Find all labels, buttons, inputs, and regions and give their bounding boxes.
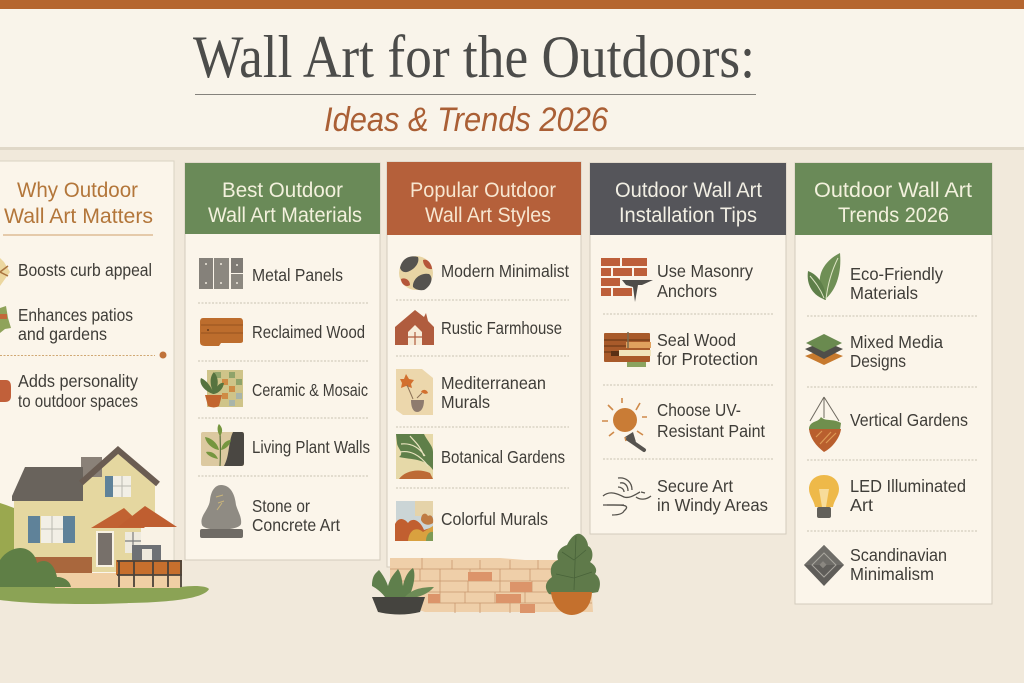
icon: sealed wood [604, 332, 651, 367]
ground [0, 586, 209, 604]
text: seal wood: Seal Wood [657, 330, 736, 350]
icon: colorful mural [395, 501, 433, 541]
text: choose uv paint: Resistant Paint [657, 421, 765, 441]
text: scandinavian minimalism: Minimalism [850, 564, 934, 584]
icon: masonry anchor [601, 258, 653, 302]
panel: best outdoor wall art materials [185, 163, 380, 560]
icon: mixed media layers [805, 334, 843, 365]
text: mixed media designs: Mixed Media [850, 332, 943, 352]
patio furniture [116, 545, 182, 587]
icon: left potted plant [372, 568, 434, 614]
panel: why outdoor wall art matters [0, 161, 174, 581]
illustration: house and garden [0, 450, 209, 604]
icon: wind [603, 478, 651, 515]
heading: best outdoor wall art materials: Best Outdoor [222, 178, 343, 202]
panel: trends 2026 [795, 163, 992, 604]
text: led illuminated art [850, 476, 966, 515]
heading: why outdoor wall art matters: Why Outdoor [17, 178, 138, 202]
text: use masonry anchors: Anchors [657, 281, 717, 301]
text: eco-friendly materials [850, 264, 943, 303]
tree [0, 503, 14, 560]
text: mediterranean murals [441, 373, 546, 412]
bullet dot [160, 352, 166, 358]
text: vertical gardens: Vertical Gardens [850, 410, 968, 430]
text: secure art [657, 476, 768, 515]
text: eco-friendly materials: Materials [850, 283, 918, 303]
text: enhances patios: Enhances patios [18, 305, 133, 325]
text: metal panels: Metal Panels [252, 265, 343, 285]
icon: personality [0, 380, 11, 402]
icon: scandinavian diamond [804, 545, 844, 586]
text: seal wood [657, 330, 758, 369]
text: adds personality [18, 371, 138, 411]
panel: installation tips [590, 163, 786, 534]
heading: installation tips: Installation Tips [619, 203, 757, 227]
heading: why outdoor wall art matters: Wall Art Matters [4, 204, 153, 228]
text: reclaimed wood: Reclaimed Wood [252, 322, 365, 342]
text: mixed media designs: Designs [850, 351, 906, 371]
title: Wall Art for the Outdoors: [193, 24, 755, 90]
text: choose uv paint [657, 400, 765, 441]
icon: hanging planter [809, 397, 841, 452]
illustration: brick wall [390, 558, 593, 613]
icon: eco leaf [808, 253, 840, 300]
icon: metal panels [199, 258, 243, 289]
text: adds personality: Adds personality [18, 371, 138, 391]
text: botanical gardens: Botanical Gardens [441, 447, 565, 467]
text: eco-friendly materials: Eco-Friendly [850, 264, 943, 284]
path [55, 573, 180, 588]
text: living plant walls: Living Plant Walls [252, 437, 370, 457]
icon: mediterranean mural [396, 369, 433, 415]
text: led illuminated art: LED Illuminated [850, 476, 966, 496]
text: stone or concrete art [252, 496, 340, 535]
icon: living plant walls [201, 424, 244, 466]
icon: botanical gardens [396, 434, 433, 479]
text: boosts curb appeal: Boosts curb appeal [18, 260, 152, 280]
text: stone or concrete art: Concrete Art [252, 515, 340, 535]
icon: right potted plant [546, 534, 600, 615]
text: led illuminated art: Art [850, 495, 873, 515]
heading: installation tips: Outdoor Wall Art [615, 178, 762, 202]
heading: installation tips [615, 178, 762, 227]
text: use masonry anchors: Use Masonry [657, 261, 753, 281]
text: adds personality: to outdoor spaces [18, 391, 138, 411]
bushes [0, 548, 71, 587]
panel: popular outdoor wall art styles [387, 162, 581, 567]
text: mixed media designs [850, 332, 943, 371]
heading: popular outdoor wall art styles: Wall Art Styles [425, 203, 551, 227]
header band [0, 0, 1024, 150]
heading: why outdoor wall art matters [4, 178, 153, 228]
text: colorful murals: Colorful Murals [441, 509, 548, 529]
text: secure art: in Windy Areas [657, 495, 768, 515]
text: seal wood: for Protection [657, 349, 758, 369]
text: scandinavian minimalism [850, 545, 947, 584]
title rule [195, 94, 756, 95]
icon: curb appeal [0, 258, 10, 286]
icon: uv sun [602, 398, 647, 450]
heading: trends 2026: Trends 2026 [838, 203, 949, 227]
text: choose uv paint: Choose UV- [657, 400, 741, 420]
icon: modern minimalist [399, 256, 433, 290]
text: secure art: Secure Art [657, 476, 733, 496]
text: ceramic and mosaic: Ceramic & Mosaic [252, 380, 368, 400]
heading: trends 2026: Outdoor Wall Art [814, 178, 972, 202]
text: scandinavian minimalism: Scandinavian [850, 545, 947, 565]
text: enhances patios: and gardens [18, 324, 107, 344]
icon: led bulb [809, 475, 839, 518]
text: use masonry anchors [657, 261, 753, 301]
text: rustic farmhouse: Rustic Farmhouse [441, 318, 562, 338]
icon: ceramic and mosaic [200, 370, 243, 408]
icon: rustic farmhouse [395, 310, 434, 345]
heading: popular outdoor wall art styles: Popular Outdoor [410, 178, 556, 202]
house [12, 450, 177, 573]
text: stone or concrete art: Stone or [252, 496, 310, 516]
icon: stone art [200, 485, 243, 538]
icon: patio plant [0, 306, 11, 333]
text: modern minimalist: Modern Minimalist [441, 261, 569, 281]
heading: trends 2026 [814, 178, 972, 227]
heading: popular outdoor wall art styles [410, 178, 556, 227]
heading: best outdoor wall art materials: Wall Art Materials [208, 203, 362, 227]
text: enhances patios [18, 305, 133, 344]
text: mediterranean murals: Murals [441, 392, 490, 412]
heading: best outdoor wall art materials [208, 178, 362, 227]
icon: reclaimed wood [200, 318, 243, 346]
subtitle: Ideas & Trends 2026 [324, 101, 608, 139]
text: mediterranean murals: Mediterranean [441, 373, 546, 393]
